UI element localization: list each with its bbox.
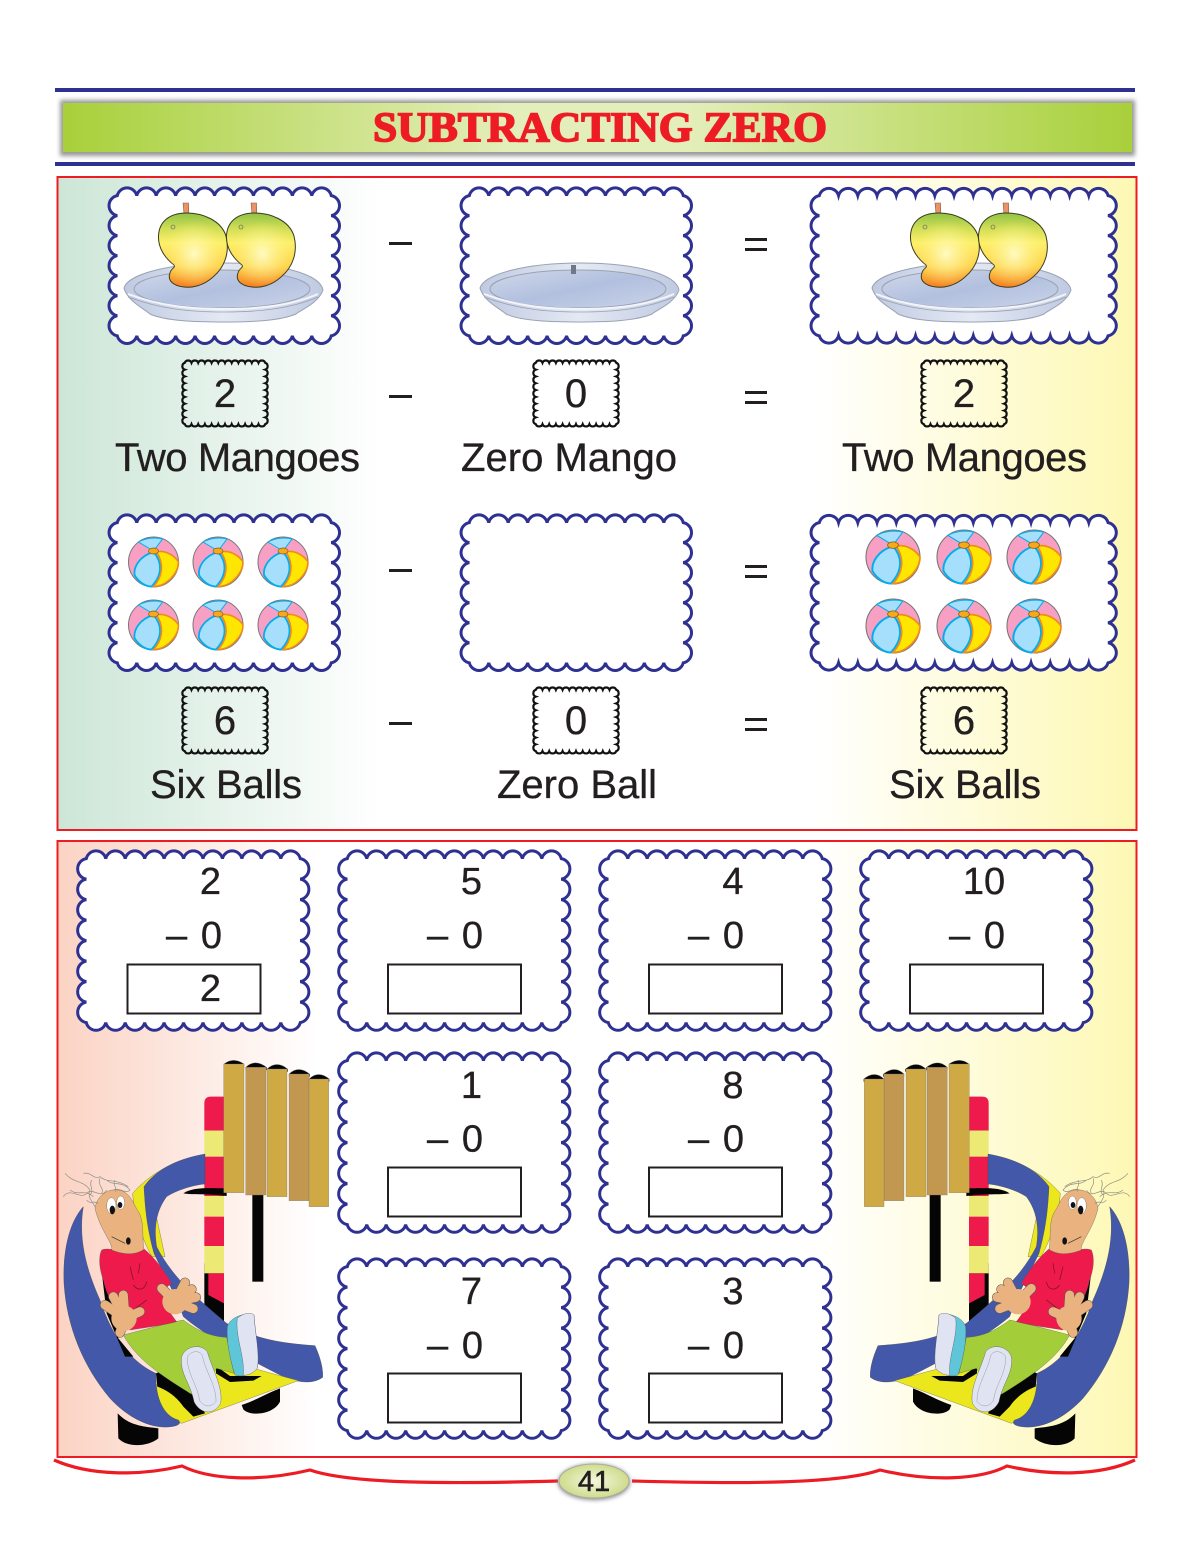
equals sign — [745, 391, 767, 404]
card: 7 - 0: – 0 — [427, 1325, 483, 1367]
label: Two Mangoes — [115, 436, 360, 480]
number box 6 — [182, 688, 268, 753]
page number: 41 — [578, 1466, 610, 1498]
label: Zero Mango — [461, 436, 677, 480]
frame: empty — [461, 515, 692, 670]
card: 2 - 0 = 2: 2 — [200, 968, 221, 1010]
card: 7 - 0: 7 — [461, 1271, 482, 1313]
card: 4 - 0: – 0 — [688, 915, 744, 957]
number box 0: 0 — [565, 372, 587, 416]
number box 0: 0 — [565, 699, 587, 743]
equals sign row 2 — [745, 565, 767, 578]
card: 8 - 0: – 0 — [688, 1118, 744, 1160]
frame: six balls result — [811, 515, 1116, 670]
top blue rule — [55, 88, 1135, 92]
card: 1 - 0 — [339, 1053, 570, 1232]
minus sign row 2 — [389, 569, 412, 572]
minus sign — [389, 395, 412, 398]
panel: worked examples — [58, 177, 1136, 830]
number box 2 — [182, 361, 268, 426]
title banner — [60, 100, 1135, 156]
card: 3 - 0 — [600, 1259, 831, 1438]
number box 0 — [533, 688, 619, 753]
equals sign — [745, 718, 767, 731]
card: 1 - 0: – 0 — [427, 1118, 483, 1160]
number box 6: 6 — [214, 699, 236, 743]
card: 2 - 0 = 2 — [78, 851, 309, 1030]
page number — [558, 1464, 630, 1500]
card: 1 - 0: 1 — [461, 1065, 482, 1107]
card: 4 - 0 — [600, 851, 831, 1030]
title: SUBTRACTING ZERO — [373, 106, 827, 152]
panel: practice exercises — [58, 841, 1136, 1457]
card: 10 - 0: 10 — [963, 861, 1005, 903]
number box 6 result: 6 — [953, 699, 975, 743]
card: 2 - 0 = 2: 2 — [200, 861, 221, 903]
frame: six balls — [109, 515, 340, 670]
bottom blue rule — [55, 162, 1135, 166]
number box 6 result — [921, 688, 1007, 753]
card: 5 - 0 — [339, 851, 570, 1030]
number box 2 result: 2 — [953, 372, 975, 416]
frame: two mangoes result — [811, 188, 1116, 343]
card: 3 - 0: – 0 — [688, 1325, 744, 1367]
card: 10 - 0: – 0 — [949, 915, 1005, 957]
card: 10 - 0 — [861, 851, 1092, 1030]
card: 8 - 0 — [600, 1053, 831, 1232]
number box 2: 2 — [214, 372, 236, 416]
frame: empty plate — [461, 188, 692, 343]
label: Six Balls — [150, 763, 302, 807]
number box 0 — [533, 361, 619, 426]
equals sign row 1 — [745, 238, 767, 251]
card: 5 - 0: – 0 — [427, 915, 483, 957]
footer wave — [54, 1460, 1135, 1483]
card: 7 - 0 — [339, 1259, 570, 1438]
card: 4 - 0: 4 — [722, 861, 744, 903]
label: Two Mangoes — [842, 436, 1087, 480]
minus sign — [389, 722, 412, 725]
card: 3 - 0: 3 — [722, 1271, 744, 1313]
number box 2 result — [921, 361, 1007, 426]
minus sign row 1 — [389, 242, 412, 245]
card: 5 - 0: 5 — [461, 861, 482, 903]
label: Zero Ball — [497, 763, 657, 807]
frame: two mangoes on a plate — [109, 188, 340, 343]
illustration: boy on slide, right — [864, 1060, 1130, 1445]
label: Six Balls — [889, 763, 1041, 807]
illustration: boy on slide, left — [63, 1060, 329, 1445]
card: 2 - 0 = 2: – 0 — [166, 915, 222, 957]
card: 8 - 0: 8 — [722, 1065, 744, 1107]
